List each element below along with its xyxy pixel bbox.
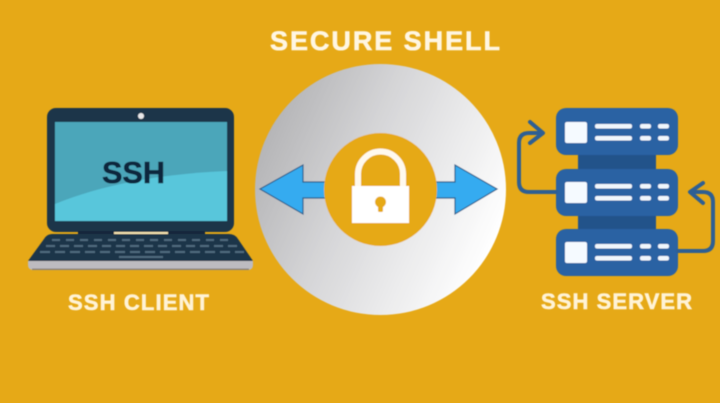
server stack: SSH server <box>556 108 678 276</box>
label: SSH server: SSH SERVER <box>541 289 692 314</box>
server unit: middle <box>556 169 678 216</box>
server unit: bottom <box>556 229 678 276</box>
keyboard deck <box>28 234 253 261</box>
server unit: top <box>556 108 678 155</box>
hinges <box>78 231 205 236</box>
laptop lid <box>47 108 234 232</box>
arrow: right <box>435 165 497 214</box>
gradient disc <box>255 64 506 315</box>
central disc with lock and arrows <box>255 64 506 315</box>
laptop screen <box>55 122 227 221</box>
laptop: SSH client <box>28 108 253 270</box>
laptop base <box>28 261 253 270</box>
hinge highlight <box>114 232 168 234</box>
artwork wrapper <box>28 26 713 315</box>
title: SECURE SHELL <box>270 26 500 56</box>
arrow: left <box>260 165 326 214</box>
inner amber circle <box>324 133 437 246</box>
camera <box>138 113 144 119</box>
icon: padlock <box>352 152 409 223</box>
arrow: server middle to top <box>519 122 556 192</box>
screen highlight <box>55 171 227 221</box>
keyboard keys <box>40 240 244 257</box>
base shadow <box>32 268 249 270</box>
screen label: SSH <box>102 155 165 190</box>
label: SSH client: SSH CLIENT <box>68 290 210 315</box>
arrow: server bottom to middle <box>678 183 713 251</box>
connector columns <box>578 150 656 234</box>
